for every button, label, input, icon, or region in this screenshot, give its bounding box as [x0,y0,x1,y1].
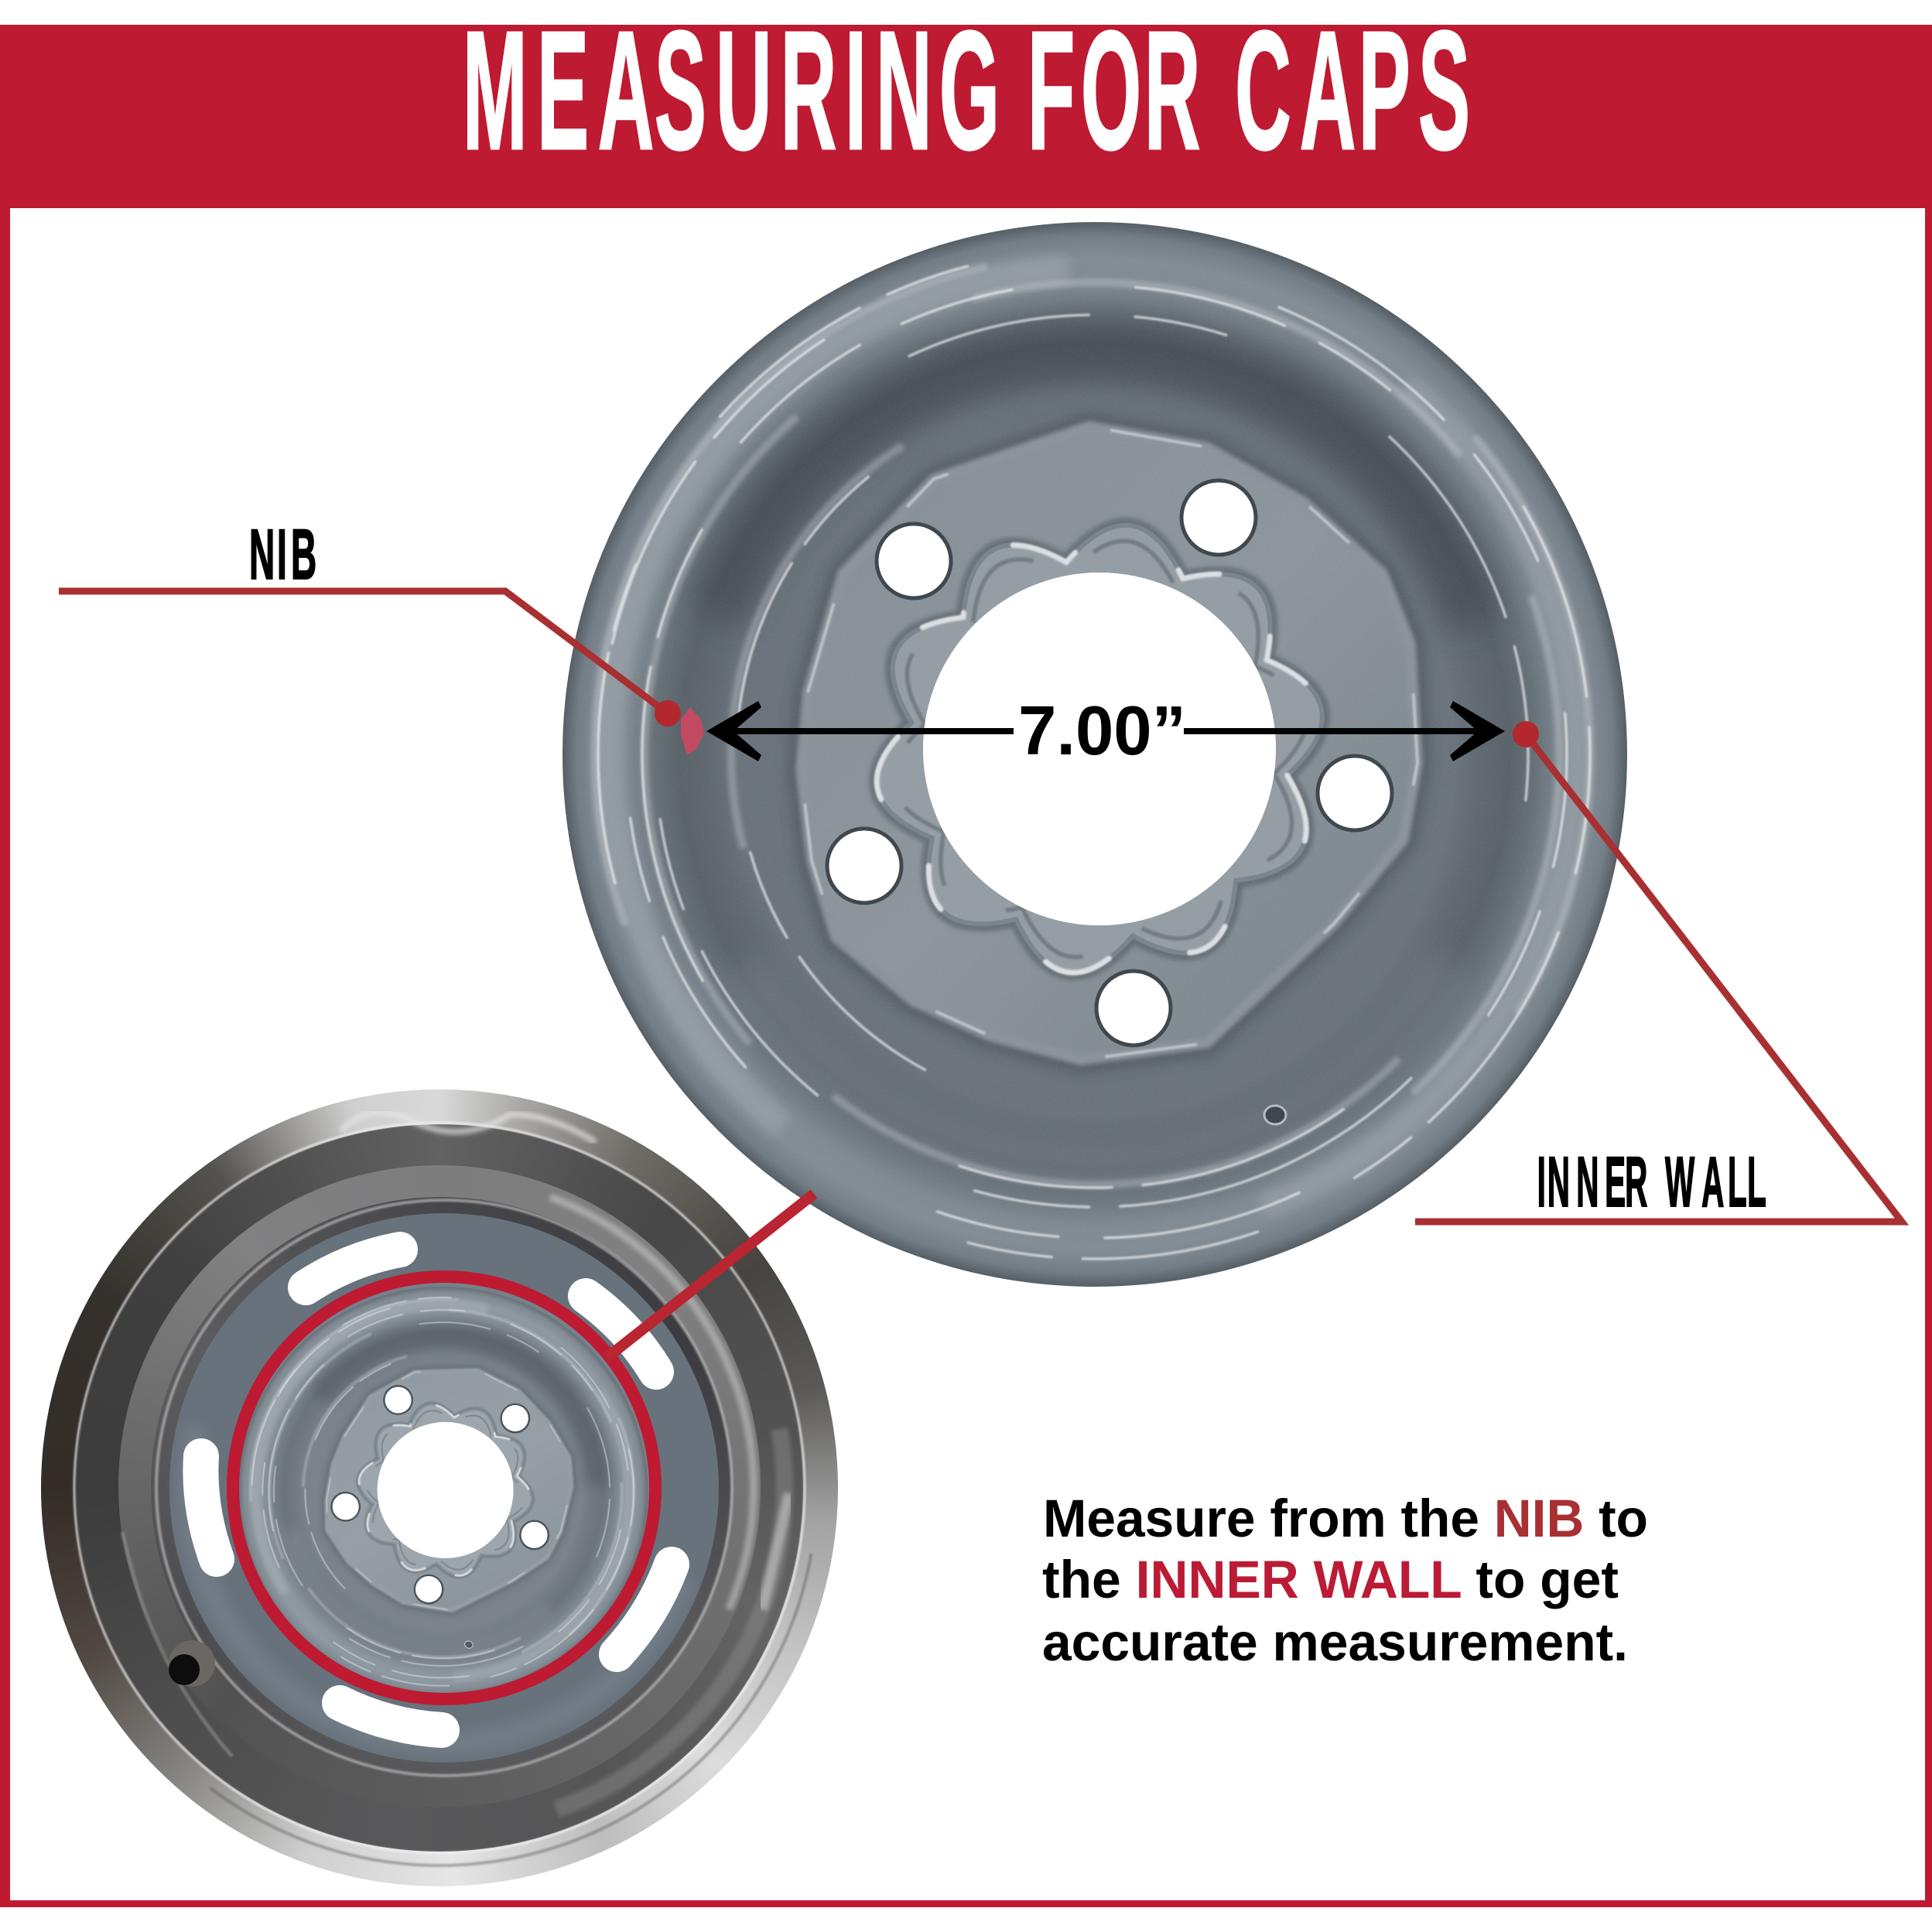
slot: bottom [340,1703,442,1730]
hub and lug holes [827,480,1392,1045]
slot: left [200,1456,217,1559]
instruction text [1042,1489,1648,1672]
lug hole 3 [1318,756,1392,830]
INNER WALL leader line [1415,734,1902,1222]
instruction text: the INNER WALL to get [1042,1550,1619,1609]
icon: NIB nub on rim [681,707,704,755]
NIB leader line [59,591,668,713]
INNER WALL label: INNER WALL [1537,1143,1766,1222]
lightening over small wheel centre [238,1282,650,1694]
lug hole 4 [1096,971,1171,1045]
wavy hub bead [853,495,1346,1003]
connector from small wheel to large wheel [607,1194,814,1358]
slot: lower right [617,1564,672,1654]
icon: valve stem [169,1640,215,1687]
large steel wheel [382,42,1807,1467]
wheel mounting plate [801,426,1417,1060]
hub hole [923,573,1276,925]
instruction text: Measure from the NIB to [1043,1489,1648,1548]
lug and hub holes kept clean above the texture [829,483,1390,1043]
instruction text: accurate measurement. [1042,1612,1628,1672]
INNER WALL point marker [1513,721,1539,747]
left arrowhead [706,701,761,761]
small wheel: painted disc [117,1161,771,1815]
NIB label: NIB [249,515,316,594]
paint texture on large wheel [563,222,1627,1287]
small wheel: chrome highlights [72,1111,813,1868]
title: MEASURING FOR CAPS [463,0,1470,184]
small rim dents [1264,402,1335,1124]
lug hole 5 [827,829,901,903]
slot: upper left [306,1250,400,1287]
lug hole 1 [877,524,951,598]
red ring marking rim on small wheel [233,1277,655,1699]
small wheel holes above the lightening [332,1387,549,1603]
lug hole 2 [1181,480,1256,555]
measurement value: 7.00” [1018,692,1186,770]
NIB point marker [655,700,681,727]
right arrowhead [1450,701,1505,761]
small wheel centre: same rim seen at smaller scale [101,1149,785,1834]
slot: upper right [586,1296,656,1372]
measurement arrow [706,701,1505,761]
chrome trim ring of small wheel [41,1089,838,1886]
